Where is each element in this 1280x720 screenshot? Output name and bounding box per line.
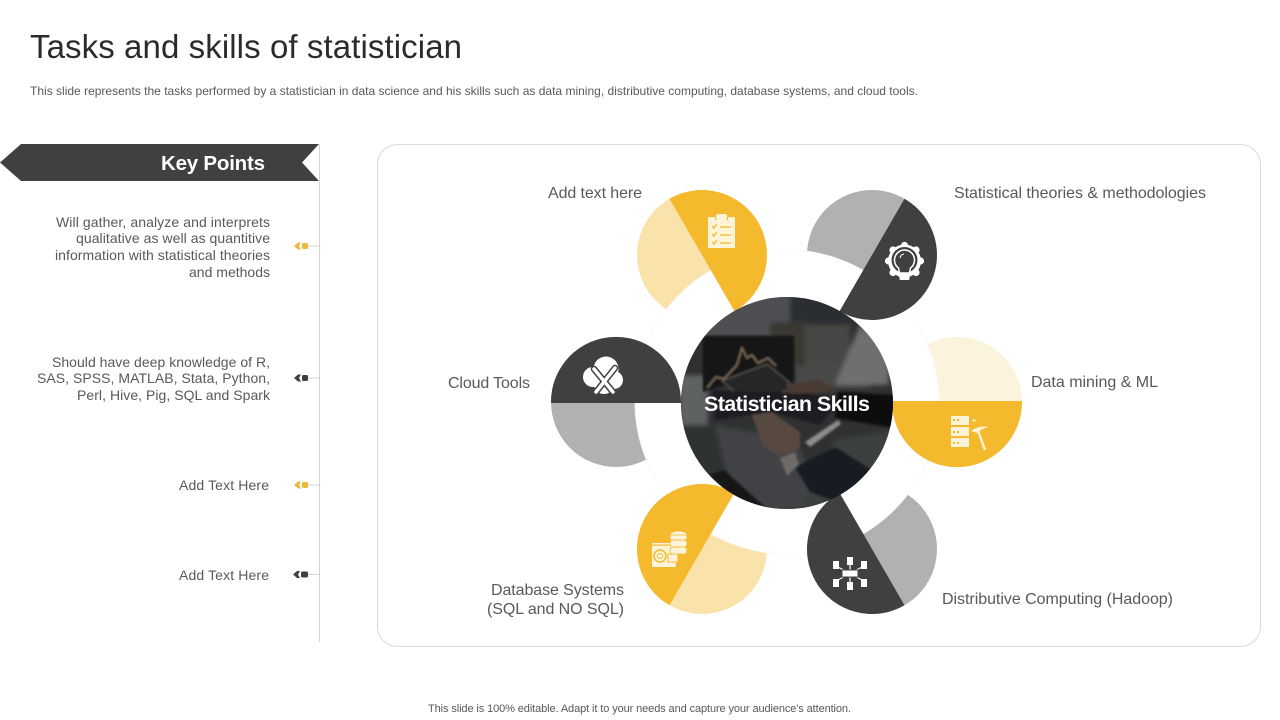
key points ribbon heading: Key Points xyxy=(161,152,265,175)
icon: clipboard checklist xyxy=(708,214,735,248)
key point 1 text: Will gather, analyze and interprets xyxy=(56,214,270,230)
icon: database and gear window xyxy=(652,531,687,567)
light petal: bottom left xyxy=(637,484,767,614)
dark half: bottom left xyxy=(637,484,734,605)
light petal: right xyxy=(892,337,1022,467)
label: database systems: (SQL and NO SQL) xyxy=(487,601,624,618)
key point 1 text: information with statistical theories xyxy=(55,247,270,263)
key point 2 marker xyxy=(294,374,319,382)
key point 2 text: Perl, Hive, Pig, SQL and Spark xyxy=(77,387,271,403)
icon: distributed network xyxy=(833,557,867,590)
icon: gear with light bulb xyxy=(885,242,924,280)
center hub: photo circle xyxy=(680,296,895,510)
panel: key points xyxy=(0,144,320,642)
light petal: top left xyxy=(637,190,767,320)
white ring xyxy=(635,250,939,554)
panel: skills diagram card xyxy=(378,144,1260,646)
light petal: bottom right xyxy=(807,484,937,614)
label: data mining: Data mining & ML xyxy=(1031,374,1158,391)
title: Tasks and skills of statistician xyxy=(30,28,462,65)
subtitle text: This slide represents the tasks performed by a statistician in data science and his skills such as data mining, distributive computing, database systems, and cloud tools. xyxy=(30,84,918,98)
icon: cloud with tools xyxy=(583,356,623,394)
dark half: left xyxy=(551,337,681,403)
center hub label: Statistician Skills xyxy=(704,392,870,416)
key point 2 text xyxy=(37,354,271,403)
dark half: top right xyxy=(840,199,937,320)
label: distributive computing: Distributive Computing (Hadoop) xyxy=(942,591,1173,608)
key point 3 text: Add Text Here xyxy=(179,477,269,493)
key point 4 text: Add Text Here xyxy=(179,567,269,583)
key point 1 text: and methods xyxy=(189,264,270,280)
key point 2 text: SAS, SPSS, MATLAB, Stata, Python, xyxy=(37,370,270,386)
footer note: This slide is 100% editable. Adapt it to your needs and capture your audience's attention. xyxy=(428,703,851,715)
label: add text here: Add text here xyxy=(548,185,642,202)
key point 1 text xyxy=(55,214,270,280)
key point 1 text: qualitative as well as quantitive xyxy=(76,230,270,246)
key points ribbon heading xyxy=(0,144,319,181)
key point 4 marker xyxy=(293,571,319,578)
label: database systems: Database Systems xyxy=(491,582,624,599)
light petal: left xyxy=(551,337,681,467)
label: database systems xyxy=(487,582,624,618)
key point 3 marker xyxy=(294,482,319,488)
dark half: top left xyxy=(670,190,767,311)
key point 2 text: Should have deep knowledge of R, xyxy=(52,354,270,370)
label: cloud tools: Cloud Tools xyxy=(448,375,530,392)
label: statistical theories: Statistical theories & methodologies xyxy=(954,185,1206,202)
dark half: bottom right xyxy=(807,493,904,614)
dark half: right xyxy=(892,401,1022,467)
light petal: top right xyxy=(807,190,937,320)
icon: data mining server and pickaxe xyxy=(951,416,988,450)
key point 1 marker xyxy=(294,242,319,250)
